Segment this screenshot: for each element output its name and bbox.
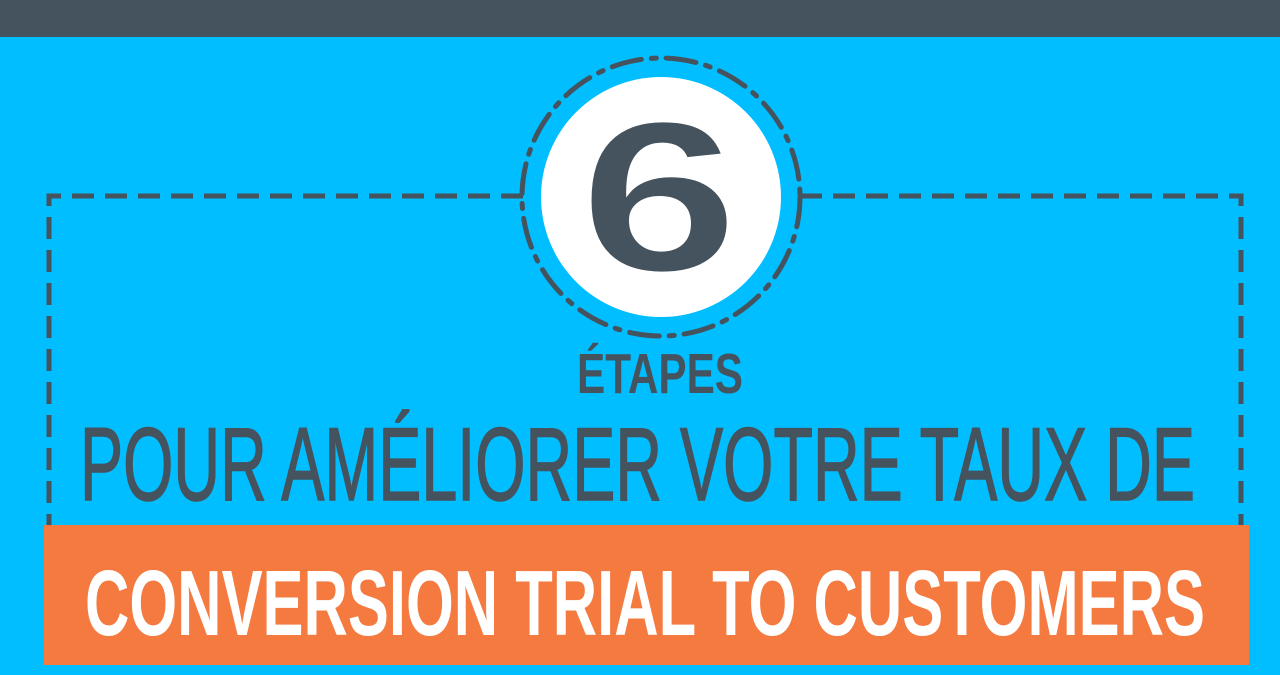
subtitle: ÉTAPES: ÉTAPES — [577, 342, 743, 406]
top bar — [0, 0, 1280, 37]
badge: number 6: 6 — [579, 76, 739, 317]
dashed frame — [49, 196, 1241, 560]
badge: number 6 — [522, 58, 800, 336]
